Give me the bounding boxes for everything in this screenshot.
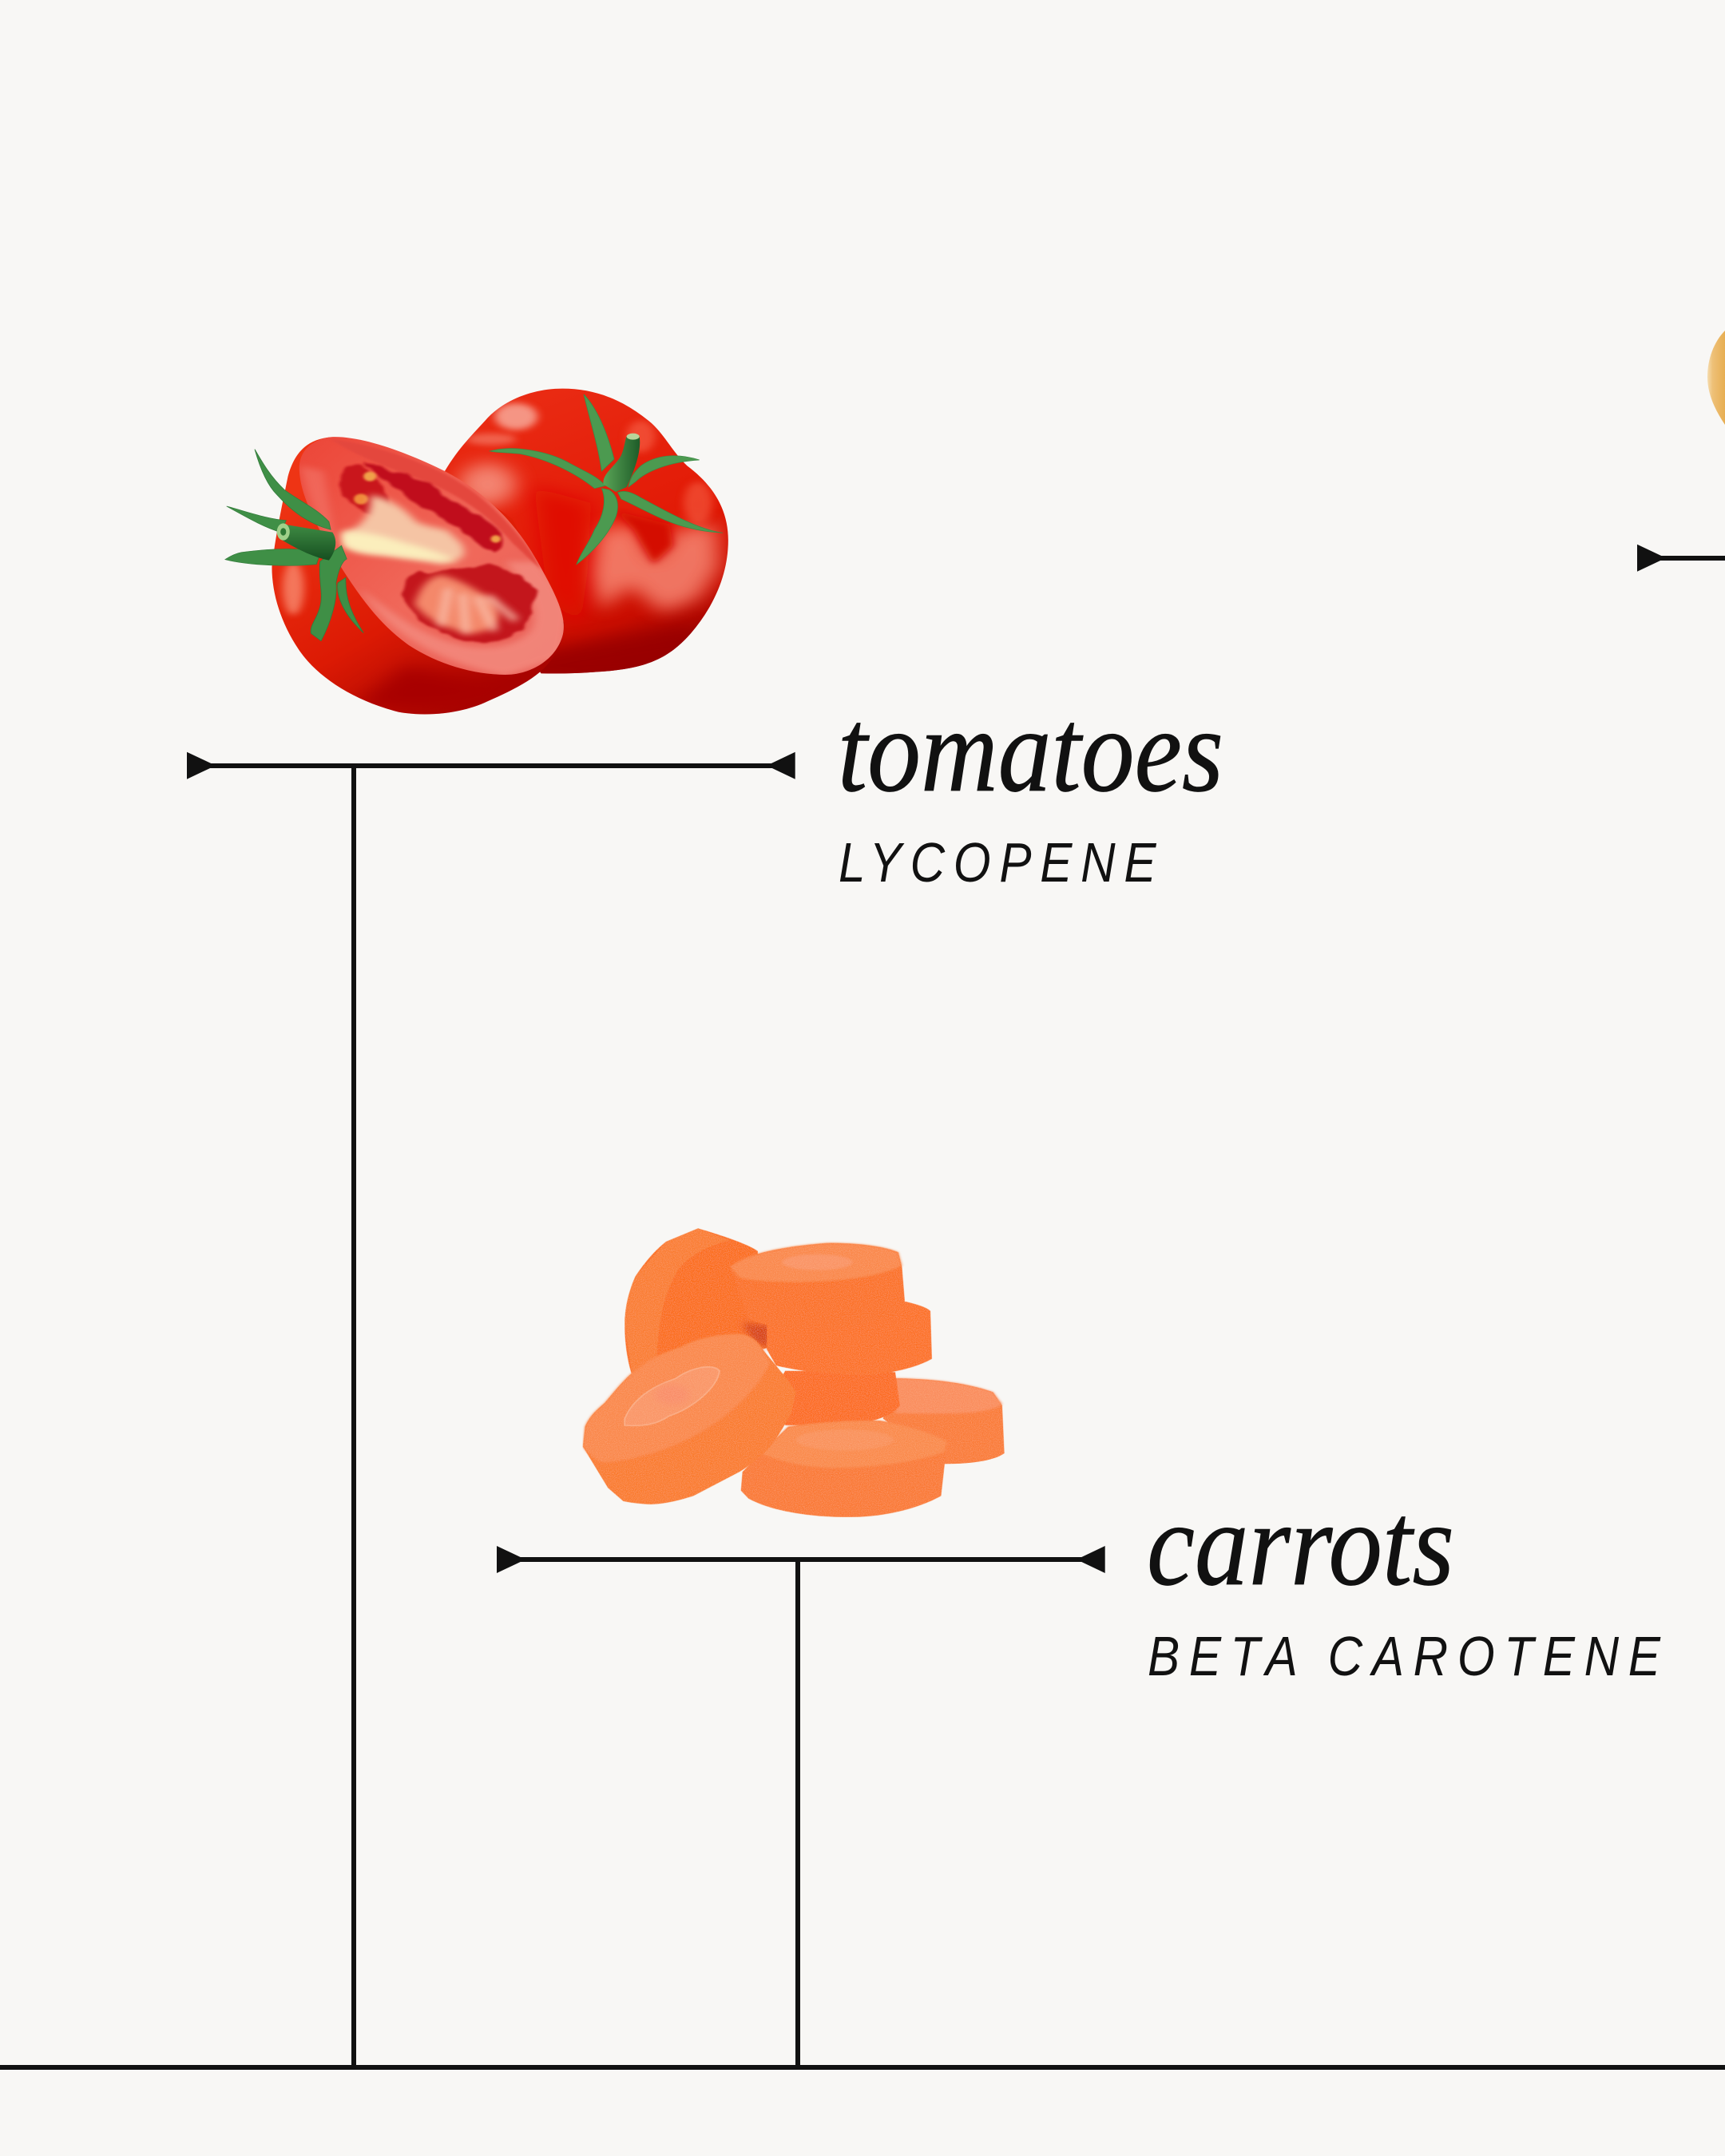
pale core <box>343 495 464 565</box>
halved tomato cut face <box>299 437 564 675</box>
whole tomato <box>445 389 728 687</box>
halved tomato skin <box>263 434 569 719</box>
whole tomato stem <box>603 435 640 492</box>
illustration: carrot slices <box>583 1228 1005 1517</box>
heading: carrots: carrots <box>1147 1478 1454 1611</box>
leaning back slice <box>625 1228 773 1376</box>
baseline axis <box>0 2065 1725 2070</box>
label: tomatoes <box>838 684 1223 894</box>
stack slice top <box>730 1243 905 1330</box>
bottom slice <box>741 1421 947 1517</box>
label: carrots <box>1147 1478 1670 1687</box>
partial golden food at the right edge <box>1707 331 1725 425</box>
subheading: BETA CAROTENE: BETA CAROTENE <box>1148 1625 1670 1687</box>
illustration: tomatoes <box>225 389 728 719</box>
partial marker at the right edge <box>1637 545 1725 572</box>
stack slice middle <box>767 1302 932 1375</box>
carrots marker: bracket with arrowheads and stem <box>497 1546 1105 2067</box>
stack slice lower middle <box>773 1371 900 1425</box>
heading: tomatoes: tomatoes <box>838 684 1223 817</box>
tomatoes marker: bracket with arrowheads and stem <box>187 752 795 2067</box>
lower seed cavity <box>402 565 537 643</box>
upper seed cavities <box>340 462 505 553</box>
stack slice lower right <box>883 1378 1005 1464</box>
front tilted slice <box>583 1334 796 1504</box>
halved tomato stem <box>277 524 335 561</box>
halved tomato sepals <box>225 450 363 641</box>
subheading: LYCOPENE: LYCOPENE <box>839 831 1164 894</box>
whole tomato sepals <box>490 394 723 565</box>
